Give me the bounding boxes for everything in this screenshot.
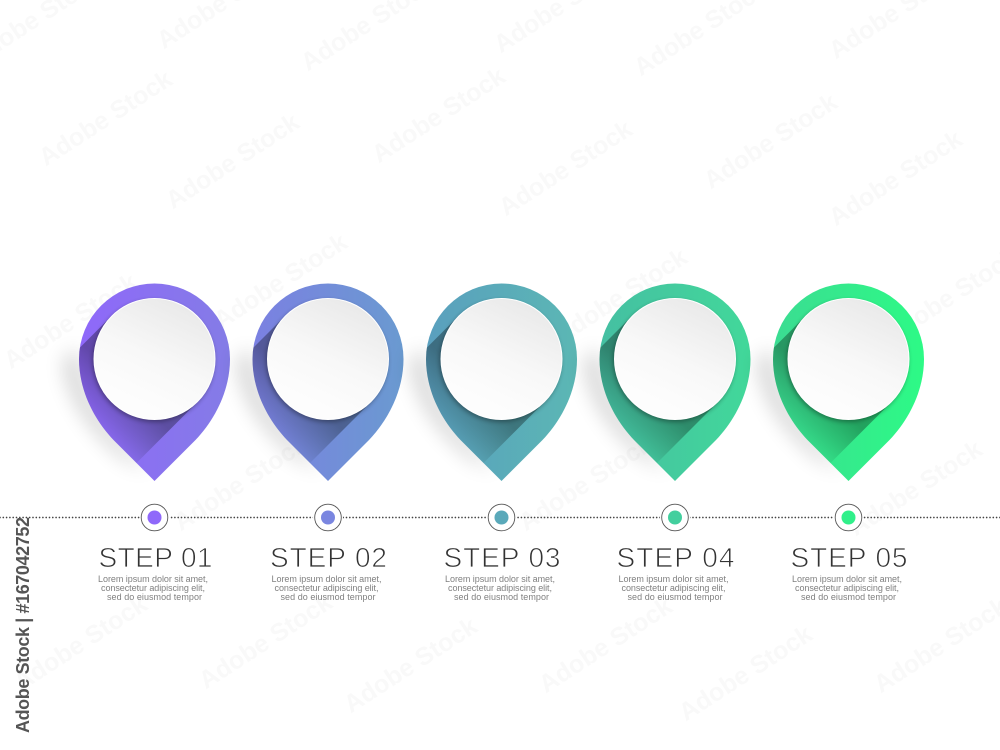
watermark pattern: Adobe Stock	[161, 108, 304, 215]
watermark pattern: Adobe Stock	[494, 115, 637, 222]
description 2: Lorem ipsum dolor sit amet,	[272, 574, 382, 584]
description 5: consectetur adipiscing elit,	[795, 583, 899, 593]
watermark pattern: Adobe Stock	[9, 590, 152, 697]
heading: step 01: STEP 01	[98, 542, 212, 573]
step 5	[726, 284, 924, 602]
description 1: Lorem ipsum dolor sit amet,	[98, 574, 208, 584]
timeline node 1	[140, 502, 170, 532]
pin 2	[205, 284, 404, 482]
dotted timeline	[0, 516, 1000, 518]
timeline node 5	[834, 502, 864, 532]
watermark pattern: Adobe Stock	[34, 65, 177, 172]
stock id side label: Adobe Stock | #167042752	[13, 517, 33, 733]
description 3: Lorem ipsum dolor sit amet,	[445, 574, 555, 584]
timeline node 3	[486, 502, 516, 532]
description 4: Lorem ipsum dolor sit amet,	[618, 574, 728, 584]
pin 5	[726, 284, 924, 482]
description 5: Lorem ipsum dolor sit amet,	[792, 574, 902, 584]
watermark pattern: Adobe Stock	[194, 588, 337, 695]
description 3	[445, 574, 555, 602]
watermark pattern: Adobe Stock	[534, 592, 677, 699]
step 4	[552, 284, 750, 602]
pin 1	[32, 284, 230, 482]
watermark pattern: Adobe Stock	[367, 62, 510, 169]
watermark pattern: Adobe Stock	[699, 88, 842, 195]
description 4: sed do eiusmod tempor	[628, 592, 722, 602]
heading: step 02: STEP 02	[270, 542, 387, 573]
timeline node 4	[660, 502, 690, 532]
description 5	[792, 574, 902, 602]
watermark pattern: Adobe Stock	[514, 430, 657, 537]
description 2: consectetur adipiscing elit,	[274, 583, 378, 593]
description 2	[272, 574, 382, 602]
watermark pattern: Adobe Stock	[674, 620, 817, 727]
heading: step 05: STEP 05	[790, 542, 908, 573]
description 1	[98, 574, 208, 602]
description 2: sed do eiusmod tempor	[280, 592, 376, 602]
step 2	[205, 284, 404, 602]
watermark pattern: Adobe Stock	[549, 243, 692, 350]
description 4	[618, 574, 728, 602]
description 1: sed do eiusmod tempor	[107, 592, 202, 602]
description 4: consectetur adipiscing elit,	[622, 583, 726, 593]
description 5: sed do eiusmod tempor	[801, 592, 896, 602]
step 1	[32, 284, 230, 602]
description 3: sed do eiusmod tempor	[454, 592, 549, 602]
watermark pattern: Adobe Stock	[844, 435, 987, 542]
pin 4	[552, 284, 750, 482]
description 1: consectetur adipiscing elit,	[101, 583, 205, 593]
step 3	[378, 284, 577, 602]
heading: step 04: STEP 04	[616, 542, 734, 573]
watermark pattern: Adobe Stock	[339, 612, 482, 719]
description 3: consectetur adipiscing elit,	[448, 583, 552, 593]
watermark pattern: Adobe Stock	[169, 430, 312, 537]
timeline node 2	[313, 502, 343, 532]
pin 3	[378, 284, 577, 482]
watermark pattern: Adobe Stock	[0, 268, 142, 375]
watermark pattern: Adobe Stock	[824, 125, 967, 232]
watermark pattern: Adobe Stock	[209, 228, 352, 335]
heading: step 03: STEP 03	[444, 542, 560, 573]
